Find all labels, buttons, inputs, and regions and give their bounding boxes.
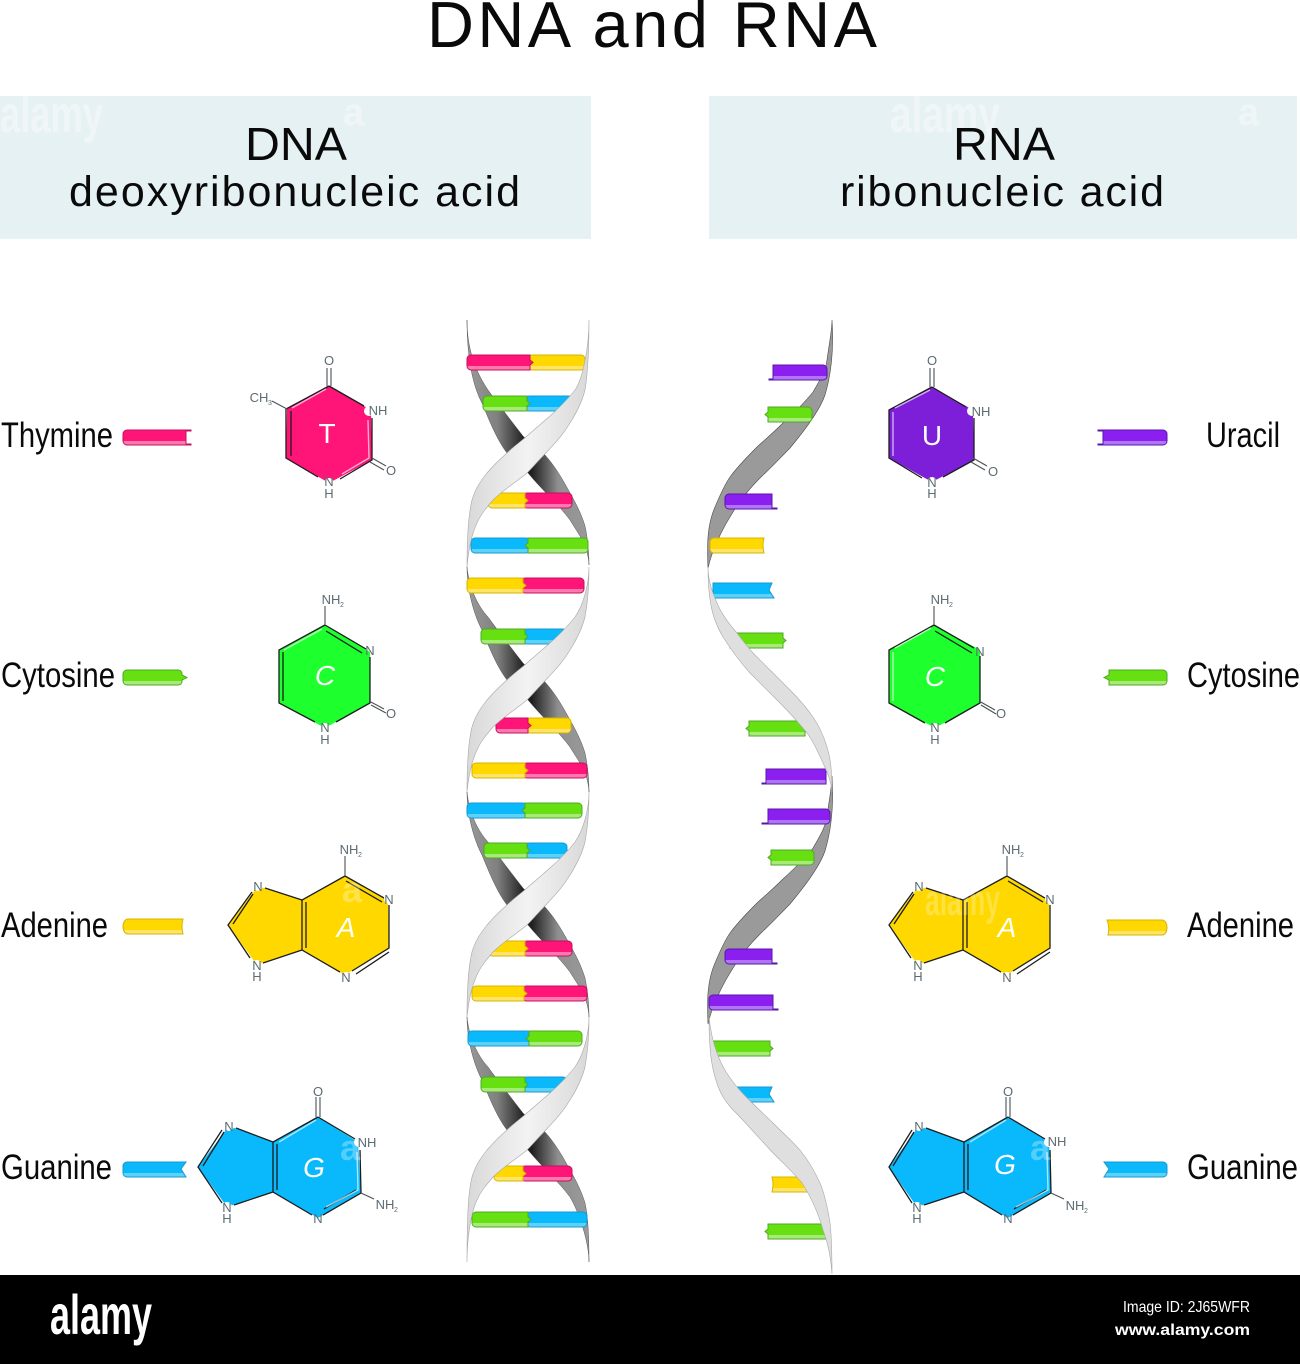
letter A: A: [335, 912, 355, 943]
molecule: Guanine right: O: [1003, 1084, 1013, 1099]
molecule: Cytosine right: [889, 592, 1006, 747]
DNA double helix: [467, 320, 589, 1262]
molecule: Cytosine left: N: [365, 643, 375, 658]
molecule: Adenine right: alamy: [925, 876, 1000, 925]
letter A: A: [996, 912, 1016, 943]
legend: Guanine: Guanine: [1, 1148, 112, 1187]
molecule: Adenine left: NH: [340, 842, 358, 857]
molecule: Cytosine left: H: [320, 732, 330, 747]
panel: RNA header: a: [1238, 92, 1260, 134]
molecule: Thymine: O: [386, 463, 396, 478]
panel: RNA header: [709, 86, 1297, 239]
molecule: Adenine left: N: [253, 879, 263, 894]
panel: RNA header: alamy: [890, 86, 1000, 144]
molecule: Guanine left: a: [340, 1127, 361, 1168]
molecule: Thymine: CH: [250, 390, 268, 405]
molecule: Cytosine right: O: [996, 706, 1006, 721]
panel: DNA header: a: [343, 92, 365, 134]
molecule: Guanine left: N: [224, 1119, 234, 1134]
heading: DNA: DNA: [245, 118, 347, 170]
molecule: Uracil: [889, 353, 998, 501]
molecule: Guanine left: N: [313, 1211, 323, 1226]
footer image id: Image ID: 2J65WFR: [1123, 1299, 1250, 1316]
molecule: Guanine left: N: [222, 1200, 232, 1215]
molecule: Cytosine right: NH: [931, 592, 949, 607]
legend: Thymine: Thymine: [1, 416, 113, 455]
DNA front strand: [467, 320, 589, 1262]
molecule: Guanine right: N: [1003, 1211, 1013, 1226]
legend: Uracil: Uracil: [1206, 416, 1280, 455]
molecule: Cytosine left: [279, 592, 396, 747]
molecule: Adenine right: N: [914, 879, 924, 894]
molecule: Guanine left: NH: [376, 1197, 394, 1212]
molecule: Thymine: H: [324, 486, 334, 501]
RNA light strand segments: [708, 567, 832, 1274]
panel: DNA header: alamy: [0, 86, 103, 144]
DNA base pairs: [467, 355, 588, 1227]
molecule: Uracil: H: [927, 486, 937, 501]
letter C: C: [315, 660, 336, 691]
heading: RNA: RNA: [953, 118, 1055, 170]
footer bar: [0, 1275, 1300, 1364]
molecule: Guanine right: 2: [1084, 1208, 1088, 1215]
letter G: G: [994, 1149, 1016, 1180]
molecule: Guanine right: N: [914, 1119, 924, 1134]
molecule: Adenine left: 2: [358, 852, 362, 859]
RNA bases: [709, 365, 830, 1239]
molecule: Thymine: [250, 353, 396, 501]
molecule: Guanine right: [889, 1084, 1088, 1226]
molecule: Guanine right: N: [912, 1200, 922, 1215]
molecule: Guanine right: NH: [1048, 1134, 1066, 1149]
molecule: Uracil: O: [927, 353, 937, 368]
molecule: Thymine: O: [324, 353, 334, 368]
text: deoxyribonucleic acid: deoxyribonucleic acid: [69, 168, 520, 216]
legend: Adenine: Adenine: [1, 906, 108, 945]
molecule: Uracil: N: [927, 475, 937, 490]
panel: DNA header: [0, 86, 591, 239]
molecule: Adenine left: N: [384, 892, 394, 907]
molecule: Adenine left: N: [341, 970, 351, 985]
molecule: Adenine right: N: [1045, 892, 1055, 907]
molecule: Uracil: O: [988, 464, 998, 479]
molecule: Adenine left: [228, 842, 394, 985]
molecule: Adenine right: NH: [1002, 842, 1020, 857]
molecule: Adenine right: N: [1002, 970, 1012, 985]
molecule: Guanine left: NH: [358, 1135, 376, 1150]
molecule: Thymine: NH: [369, 403, 387, 418]
molecule: Guanine right: NH: [1066, 1198, 1084, 1213]
molecule: Adenine right: 2: [1020, 852, 1024, 859]
legend: Guanine right: [1104, 1148, 1298, 1187]
legend: Adenine right: [1107, 906, 1294, 945]
molecule: Cytosine right: H: [930, 732, 940, 747]
DNA back strand: [467, 320, 589, 1262]
letter C: C: [925, 661, 946, 692]
molecule: Cytosine left: N: [320, 720, 330, 735]
molecule: Cytosine right: 2: [949, 602, 953, 609]
molecule: Guanine left: [198, 1084, 398, 1226]
legend: Cytosine right: [1104, 656, 1300, 695]
letter U: U: [922, 420, 942, 451]
molecule: Guanine right: a: [1030, 1127, 1051, 1168]
legend: Uracil: [1098, 416, 1280, 455]
molecule: Adenine right: H: [913, 969, 923, 984]
molecule: Adenine left: a: [342, 869, 363, 910]
molecule: Cytosine left: NH: [322, 592, 340, 607]
molecule: Adenine right: [889, 842, 1055, 985]
RNA single strand: [708, 320, 833, 1274]
molecule: Guanine right: H: [912, 1211, 922, 1226]
letter G: G: [303, 1152, 325, 1183]
molecule: Cytosine left: O: [386, 706, 396, 721]
molecule: Guanine left: O: [313, 1084, 323, 1099]
RNA dark strand segments: [708, 320, 833, 1024]
molecule: Thymine: 3: [268, 400, 272, 407]
footer url: www.alamy.com: [1114, 1322, 1250, 1339]
molecule: Guanine left: 2: [394, 1207, 398, 1214]
letter T: T: [318, 418, 336, 449]
molecule: Adenine left: N: [252, 958, 262, 973]
molecule: Cytosine right: N: [975, 644, 985, 659]
molecule: Uracil: NH: [972, 404, 990, 419]
text: ribonucleic acid: ribonucleic acid: [840, 168, 1164, 216]
molecule: Adenine right: N: [913, 958, 923, 973]
footer logo: alamy: [50, 1283, 152, 1346]
molecule: Adenine left: H: [252, 969, 262, 984]
molecule: Thymine: N: [324, 474, 334, 489]
legend: Cytosine: Cytosine: [1, 656, 115, 695]
molecule: Guanine left: H: [222, 1211, 232, 1226]
molecule: Cytosine right: N: [930, 720, 940, 735]
molecule: Cytosine left: 2: [340, 602, 344, 609]
